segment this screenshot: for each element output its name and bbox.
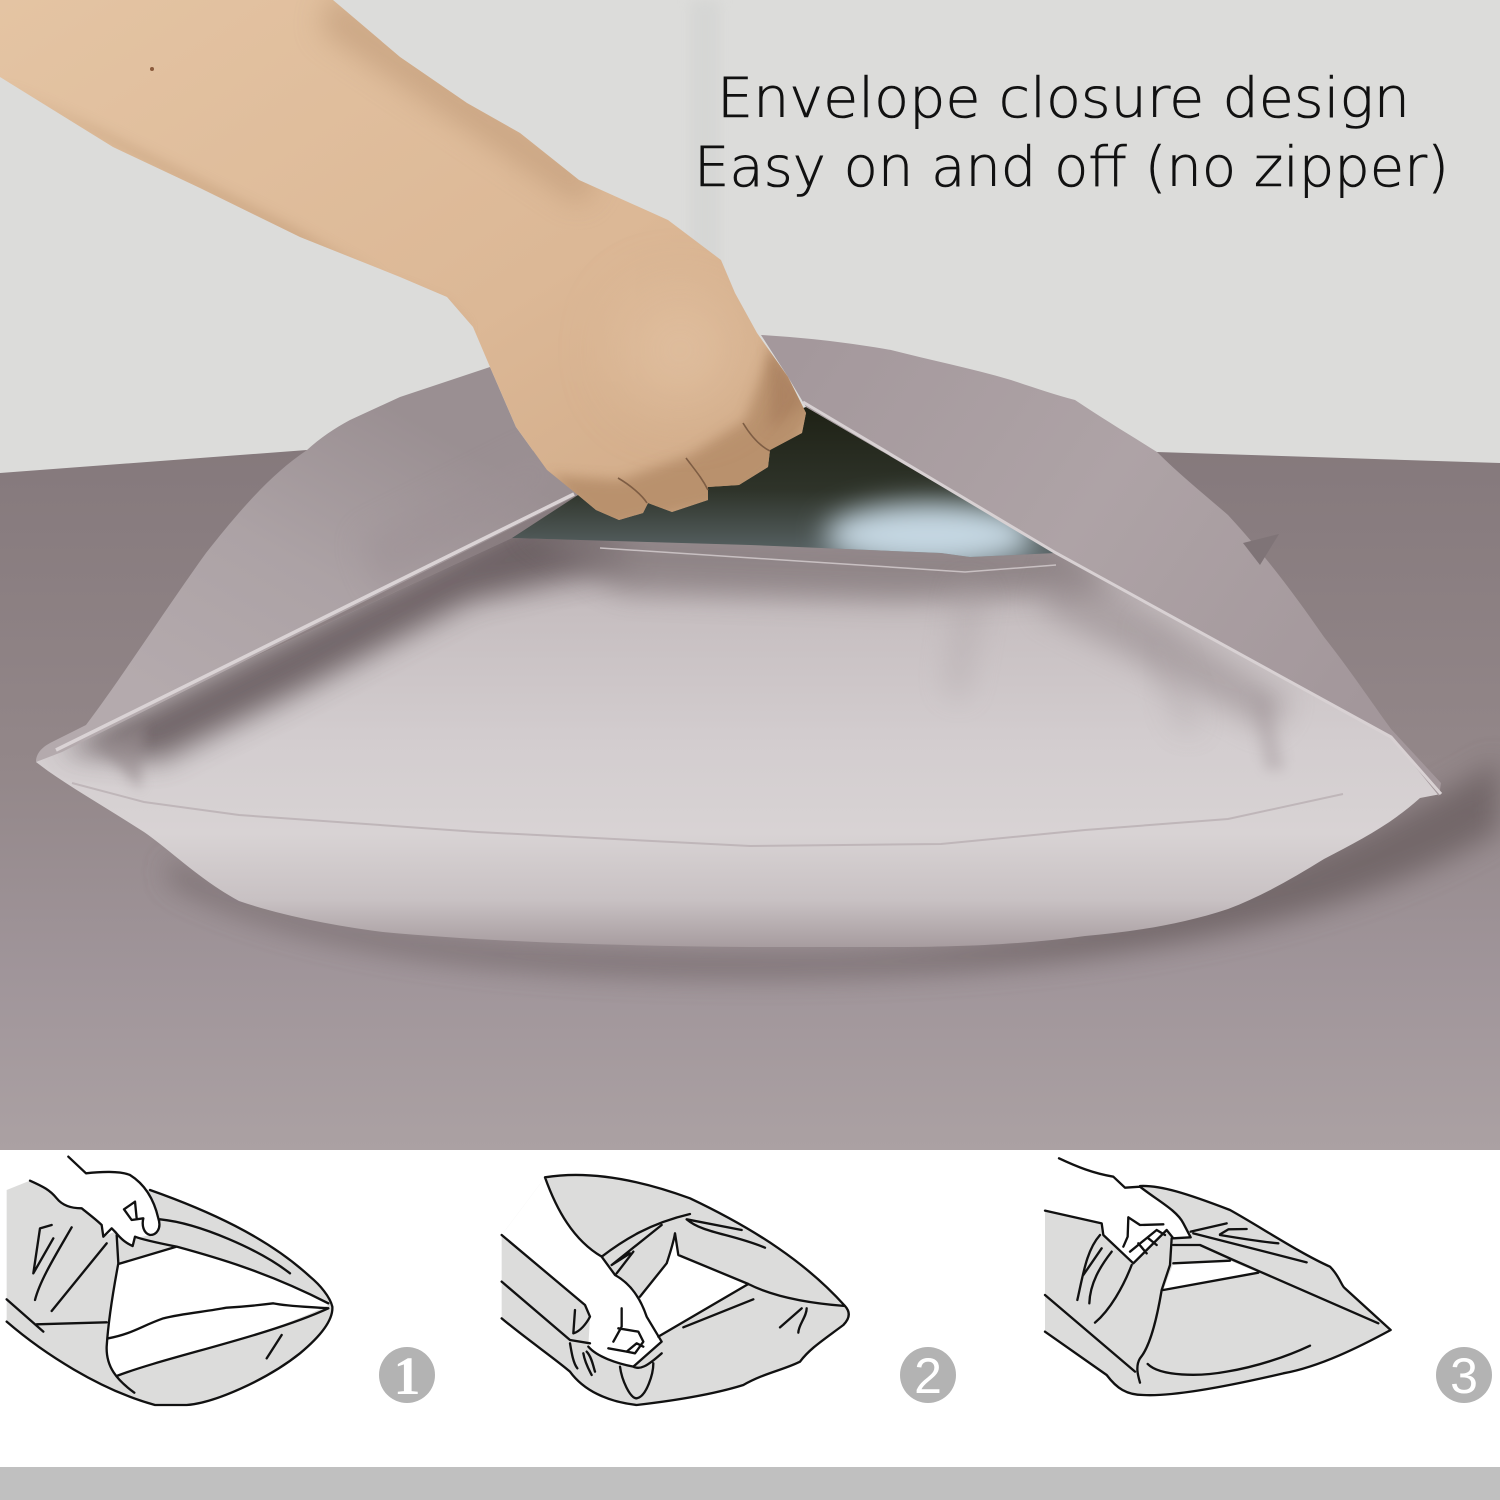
heading: envelope closure [694,66,1449,199]
white instruction band [0,1150,1500,1467]
body stitch seam [72,783,1343,846]
left flap [36,367,578,762]
step 2 number badge: 2 [914,1348,942,1404]
step 1 line art [7,1157,332,1405]
right flap [761,335,1441,796]
step 1 number badge: 1 [394,1346,420,1406]
step 3 hand fill [1102,1187,1191,1263]
step 1 hand fill [30,1157,159,1246]
step 3 pillow fill [1045,1186,1391,1395]
step 3 number badge: 3 [1450,1348,1478,1404]
step 2 number badge [900,1347,956,1404]
left flap hem [56,494,574,750]
pillow corner fold behind flap [1243,534,1279,565]
right flap hem [803,402,1441,794]
step 1 pillow fill [7,1181,332,1405]
pillow photo [0,0,1500,975]
pillow body [36,500,1441,947]
pillow opening showing inner pillow [512,407,1056,567]
arm mole [150,67,154,71]
hand [0,0,815,530]
grey footer band [0,1467,1500,1500]
step 1 number badge [379,1346,435,1406]
top hem stitch [600,548,1056,572]
wall background [0,0,1500,480]
fist shadow [554,353,806,520]
step 3 line art [1045,1158,1391,1395]
arm edge shading [320,0,600,205]
heading line 1: Envelope closure design [717,66,1410,130]
step 3 opening [1163,1261,1258,1290]
step 2 line art [502,1175,849,1405]
step 2 illustration [502,1175,849,1405]
step 3 illustration [1045,1158,1391,1395]
step 1 illustration [7,1157,332,1405]
bed sheet [0,450,1500,1150]
step 1 opening [106,1247,328,1376]
step 2 hand and background cut-out [502,1177,662,1367]
step 2 opening [640,1235,748,1337]
finger creases [618,423,770,503]
heading line 2: Easy on and off (no zipper) [694,135,1449,199]
step 3 number badge [1436,1347,1492,1404]
step 2 pillow fill [502,1175,849,1405]
pillow shadow on sheet [170,760,1500,975]
